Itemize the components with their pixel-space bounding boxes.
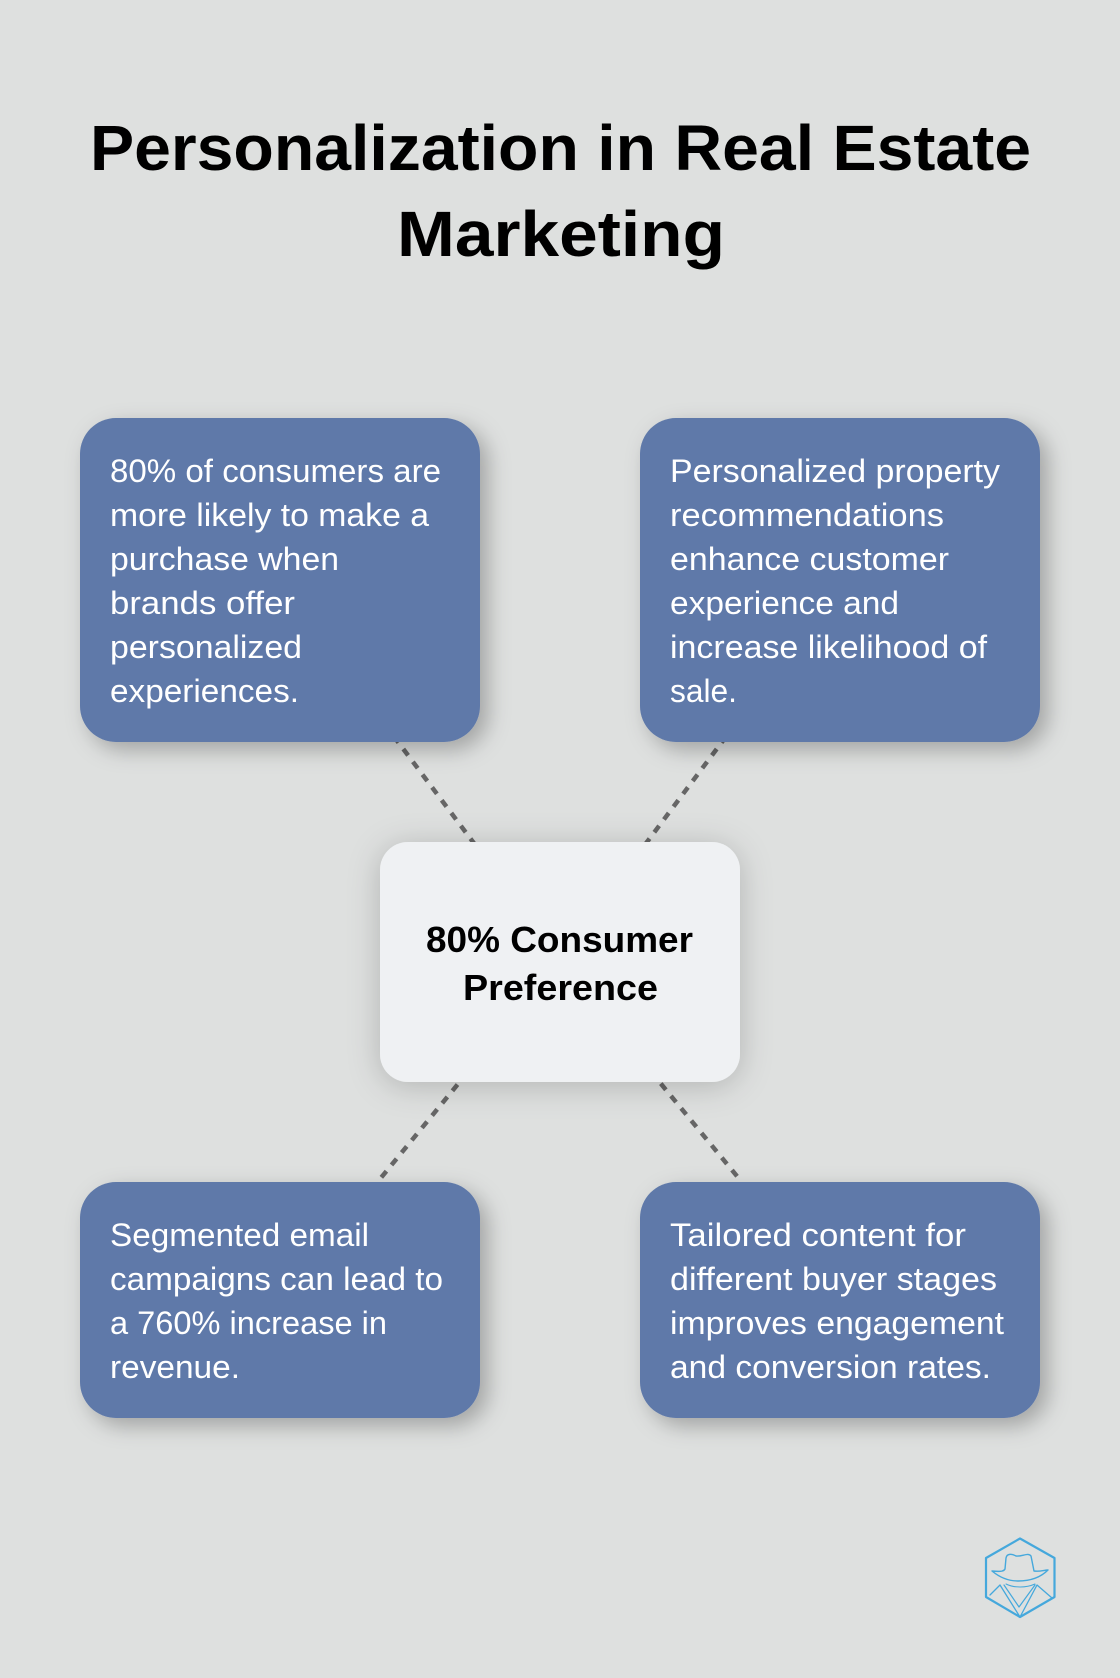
panel: tailored content — [640, 1182, 1040, 1418]
panel: segmented email: a 760% increase in — [110, 1305, 387, 1341]
panel: segmented email: revenue. — [110, 1349, 240, 1385]
connector: bottom left — [381, 1085, 458, 1178]
panel: 80% of consumers: purchase when — [110, 541, 339, 577]
panel: central node: 80% Consumer — [426, 919, 693, 960]
panel: central node: Preference — [463, 967, 658, 1008]
panel: 80% of consumers: experiences. — [110, 673, 299, 709]
panel: personalized property recommendations: recommendations — [670, 497, 944, 533]
title: Marketing — [397, 198, 725, 270]
panel: 80% of consumers: brands offer — [110, 585, 295, 621]
panel: personalized property recommendations: Personalized property — [670, 453, 1000, 489]
panel: personalized property recommendations: increase likelihood of — [670, 629, 987, 665]
connector: top right — [644, 736, 726, 846]
panel: segmented email: Segmented email — [110, 1217, 369, 1253]
panel: segmented email: campaigns can lead to — [110, 1261, 443, 1297]
panel: personalized property recommendations: sale. — [670, 673, 737, 709]
panel: 80% of consumers — [80, 418, 480, 742]
panel: central node — [380, 842, 740, 1082]
panel: tailored content: Tailored content for — [670, 1217, 966, 1253]
panel: segmented email — [80, 1182, 480, 1418]
title: Personalization in Real Estate — [90, 112, 1031, 184]
panel: personalized property recommendations: experience and — [670, 585, 899, 621]
connector: top left — [394, 736, 476, 846]
panel: personalized property recommendations — [640, 418, 1040, 742]
panel: 80% of consumers: more likely to make a — [110, 497, 429, 533]
panel: 80% of consumers: 80% of consumers are — [110, 453, 441, 489]
panel: 80% of consumers: personalized — [110, 629, 302, 665]
panel: tailored content: and conversion rates. — [670, 1349, 991, 1385]
title — [90, 112, 1031, 270]
connector: bottom right — [661, 1084, 738, 1178]
panel: personalized property recommendations: enhance customer — [670, 541, 949, 577]
icon: hexagon spy logo — [986, 1538, 1054, 1617]
panel: tailored content: different buyer stages — [670, 1261, 997, 1297]
panel: tailored content: improves engagement — [670, 1305, 1004, 1341]
